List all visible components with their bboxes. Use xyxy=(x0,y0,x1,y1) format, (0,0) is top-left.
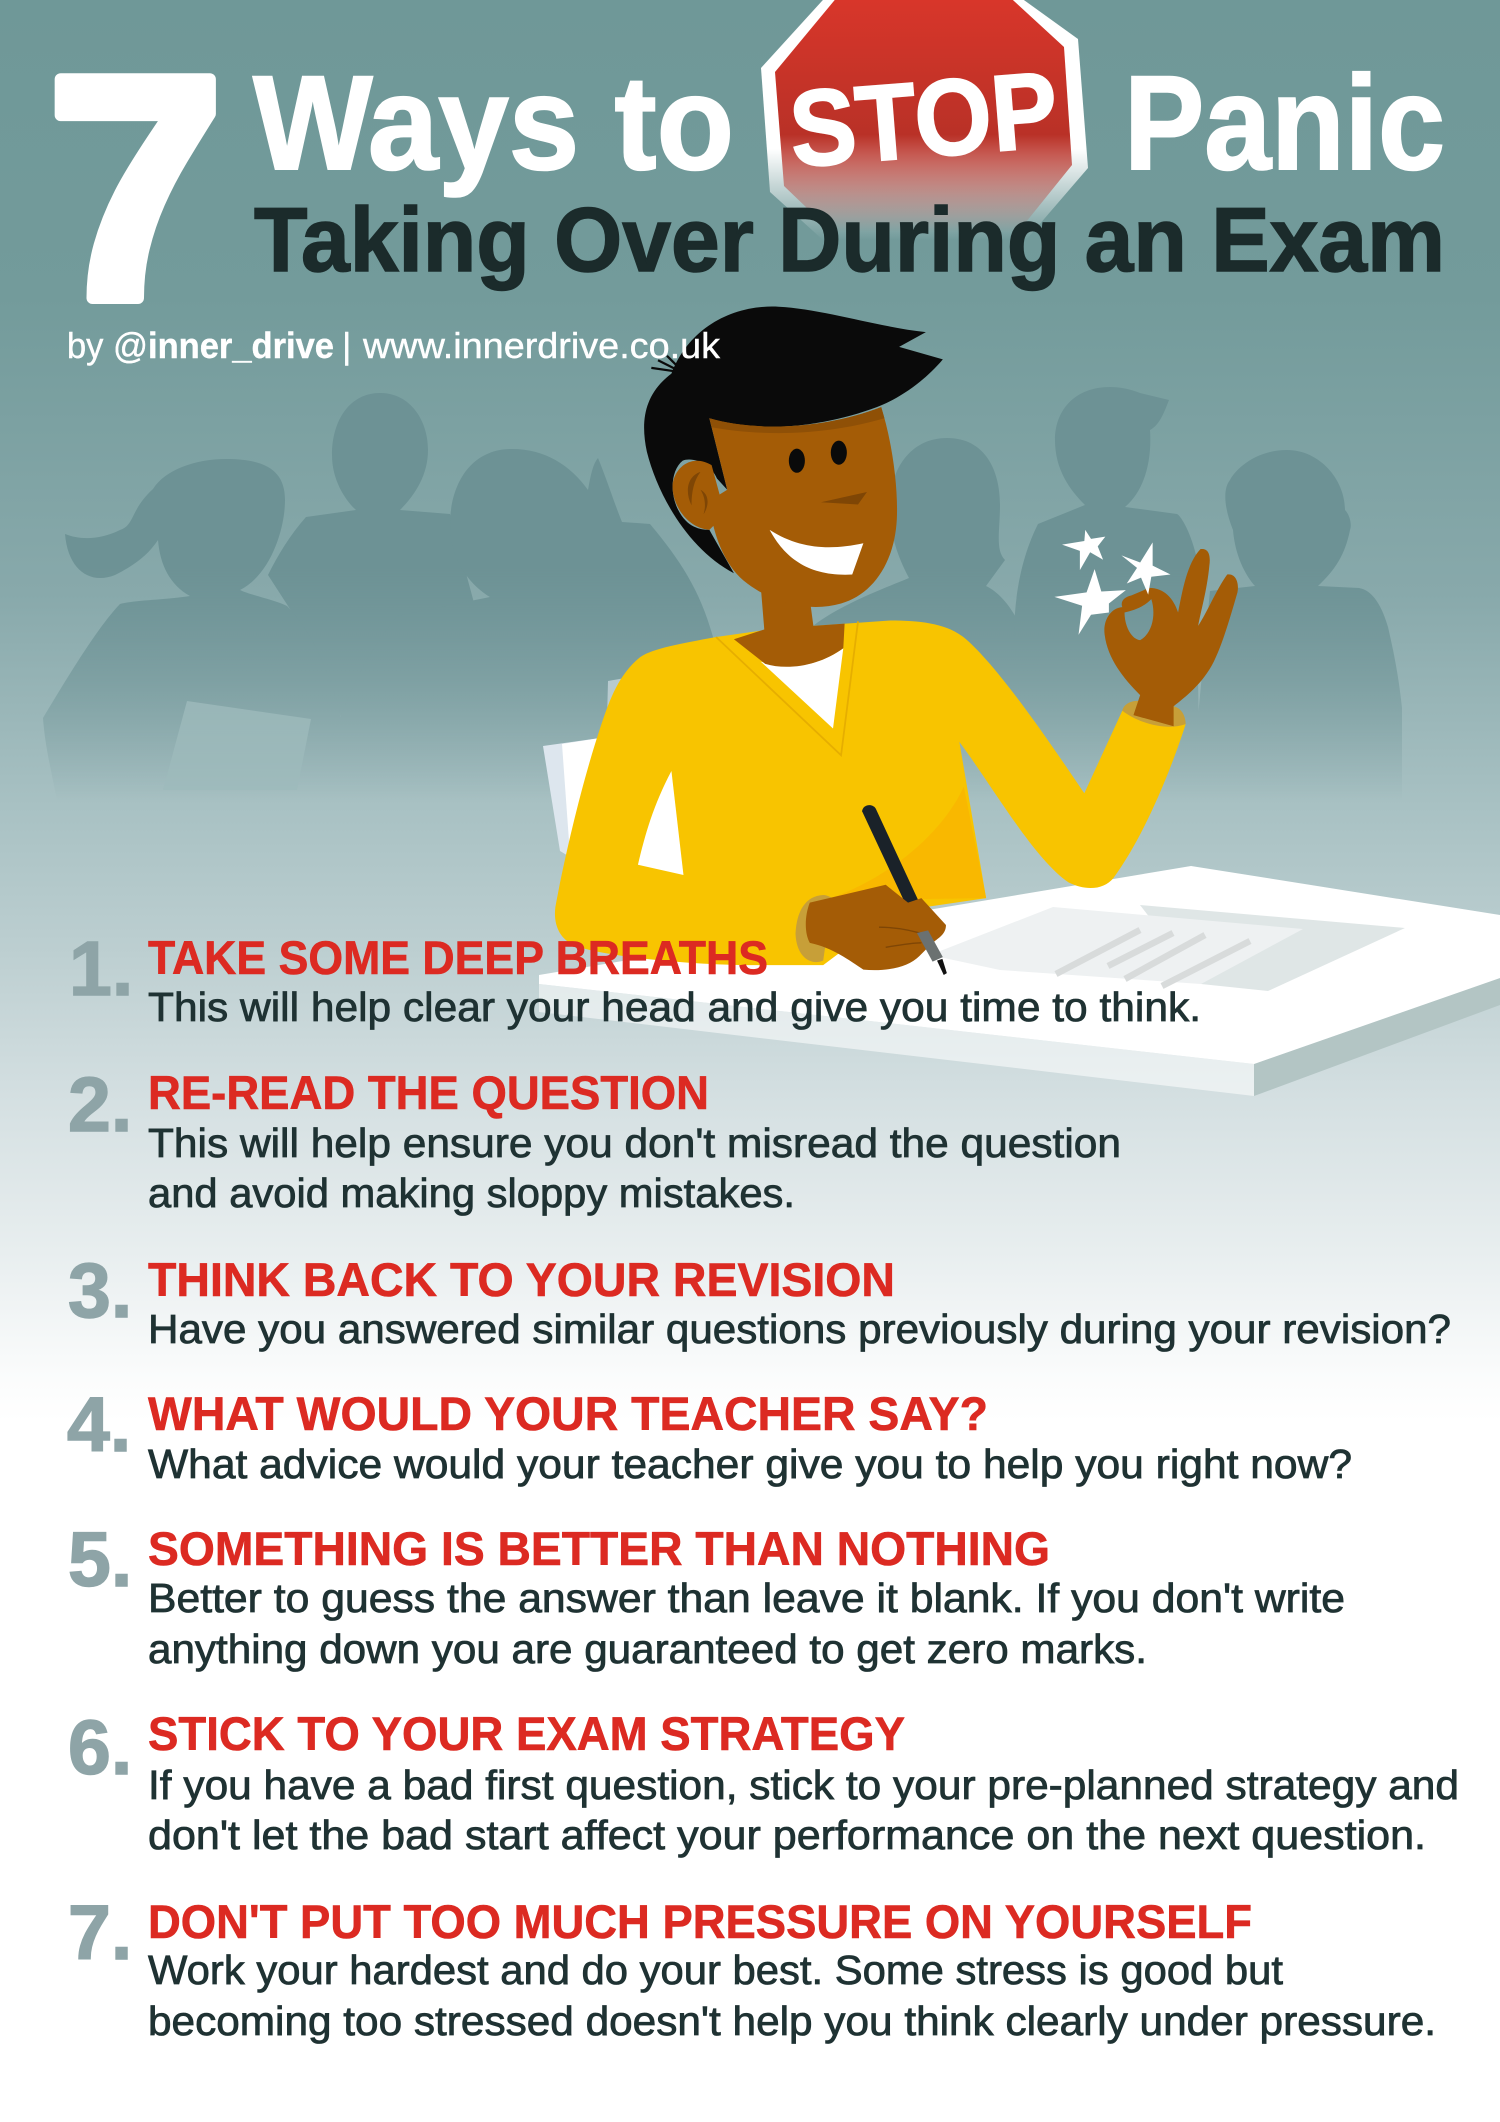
silhouette: student at back right xyxy=(1014,387,1200,800)
number 2: 2. xyxy=(68,1062,132,1148)
tip 5 xyxy=(68,1517,1345,1672)
raised hand xyxy=(1104,549,1238,726)
body 6 xyxy=(148,1762,1459,1858)
byline: | xyxy=(342,325,351,366)
face xyxy=(709,407,897,607)
tip 2 xyxy=(68,1062,1121,1216)
number 6: 6. xyxy=(68,1705,132,1791)
silhouette: student with ponytail xyxy=(43,459,340,768)
title: Ways to: Ways to xyxy=(253,49,734,198)
body 1: This will help clear your head and give you time to think. xyxy=(148,984,1201,1030)
nose xyxy=(821,492,867,504)
sparkle stars xyxy=(1054,530,1170,635)
silhouette: student at back left xyxy=(268,393,480,725)
heading 1: TAKE SOME DEEP BREATHS xyxy=(148,931,768,984)
lines on exam paper xyxy=(1056,930,1250,986)
byline: www.innerdrive.co.uk xyxy=(362,325,721,366)
body 7 xyxy=(148,1947,1436,2044)
smile xyxy=(770,530,863,575)
STOP word: STOP xyxy=(785,48,1062,190)
writing hand xyxy=(806,885,946,970)
silhouette: student with raised arm xyxy=(306,449,720,800)
heading 2: RE-READ THE QUESTION xyxy=(148,1066,709,1119)
stop sign xyxy=(761,0,1088,240)
body 2 xyxy=(148,1120,1121,1216)
neck xyxy=(734,586,845,667)
sweater shading xyxy=(823,787,986,900)
tip 4 xyxy=(67,1382,1352,1487)
body 3: Have you answered similar questions previously during your revision? xyxy=(148,1306,1451,1352)
body 5: anything down you are guaranteed to get zero marks. xyxy=(148,1626,1147,1672)
student figure xyxy=(555,307,1238,975)
body 4: What advice would your teacher give you to help you right now? xyxy=(148,1441,1352,1487)
chair back xyxy=(543,678,625,860)
forehead shadow xyxy=(709,407,884,433)
body 5 xyxy=(148,1575,1345,1672)
pen tip xyxy=(917,930,943,962)
body 6: If you have a bad first question, stick to your pre-planned strategy and xyxy=(148,1762,1459,1808)
ear xyxy=(673,461,725,530)
byline xyxy=(67,325,721,366)
byline: by @inner_drive xyxy=(67,325,334,366)
gap under arm xyxy=(638,771,683,875)
silhouette: student on far right xyxy=(1198,450,1402,768)
number 7: 7. xyxy=(68,1890,132,1976)
number 5: 5. xyxy=(68,1517,132,1603)
silhouette: student behind main figure xyxy=(813,438,1029,800)
heading 7: DON'T PUT TOO MUCH PRESSURE ON YOURSELF xyxy=(148,1895,1252,1948)
body 7: becoming too stressed doesn't help you think clearly under pressure. xyxy=(148,1998,1436,2044)
heading 4: WHAT WOULD YOUR TEACHER SAY? xyxy=(148,1387,988,1440)
lower sleeve cuff xyxy=(796,895,832,962)
title: Panic: Panic xyxy=(1124,49,1445,198)
body 6: don't let the bad start affect your performance on the next question. xyxy=(148,1812,1426,1858)
number 1: 1. xyxy=(69,926,133,1012)
neckline xyxy=(716,621,858,755)
pen xyxy=(862,805,921,909)
paper held by silhouette xyxy=(163,701,311,790)
sleeve cuff xyxy=(1122,701,1186,727)
number 3: 3. xyxy=(68,1248,132,1334)
hair xyxy=(644,307,943,573)
desk xyxy=(539,866,1500,1096)
tip 3 xyxy=(68,1248,1451,1352)
subtitle: Taking Over During an Exam xyxy=(254,190,1445,291)
number 4: 4. xyxy=(67,1382,131,1468)
tip 1 xyxy=(69,926,1201,1030)
tip 6 xyxy=(68,1705,1459,1858)
back sheet of paper xyxy=(1140,905,1405,991)
body 7: Work your hardest and do your best. Some stress is good but xyxy=(148,1947,1284,1993)
heading 6: STICK TO YOUR EXAM STRATEGY xyxy=(148,1707,905,1760)
T-shirt xyxy=(761,648,843,729)
eyes xyxy=(789,449,805,473)
silhouettes of other students xyxy=(43,387,1402,800)
body 2: and avoid making sloppy mistakes. xyxy=(148,1170,795,1216)
sweater xyxy=(555,621,1186,965)
heading 3: THINK BACK TO YOUR REVISION xyxy=(148,1253,895,1306)
body 5: Better to guess the answer than leave it blank. If you don't write xyxy=(148,1575,1345,1621)
exam paper xyxy=(930,907,1303,984)
tip 7 xyxy=(68,1890,1436,2044)
heading 5: SOMETHING IS BETTER THAN NOTHING xyxy=(148,1522,1050,1575)
body 2: This will help ensure you don't misread the question xyxy=(148,1120,1121,1166)
title numeral 7: 7 xyxy=(47,11,224,366)
